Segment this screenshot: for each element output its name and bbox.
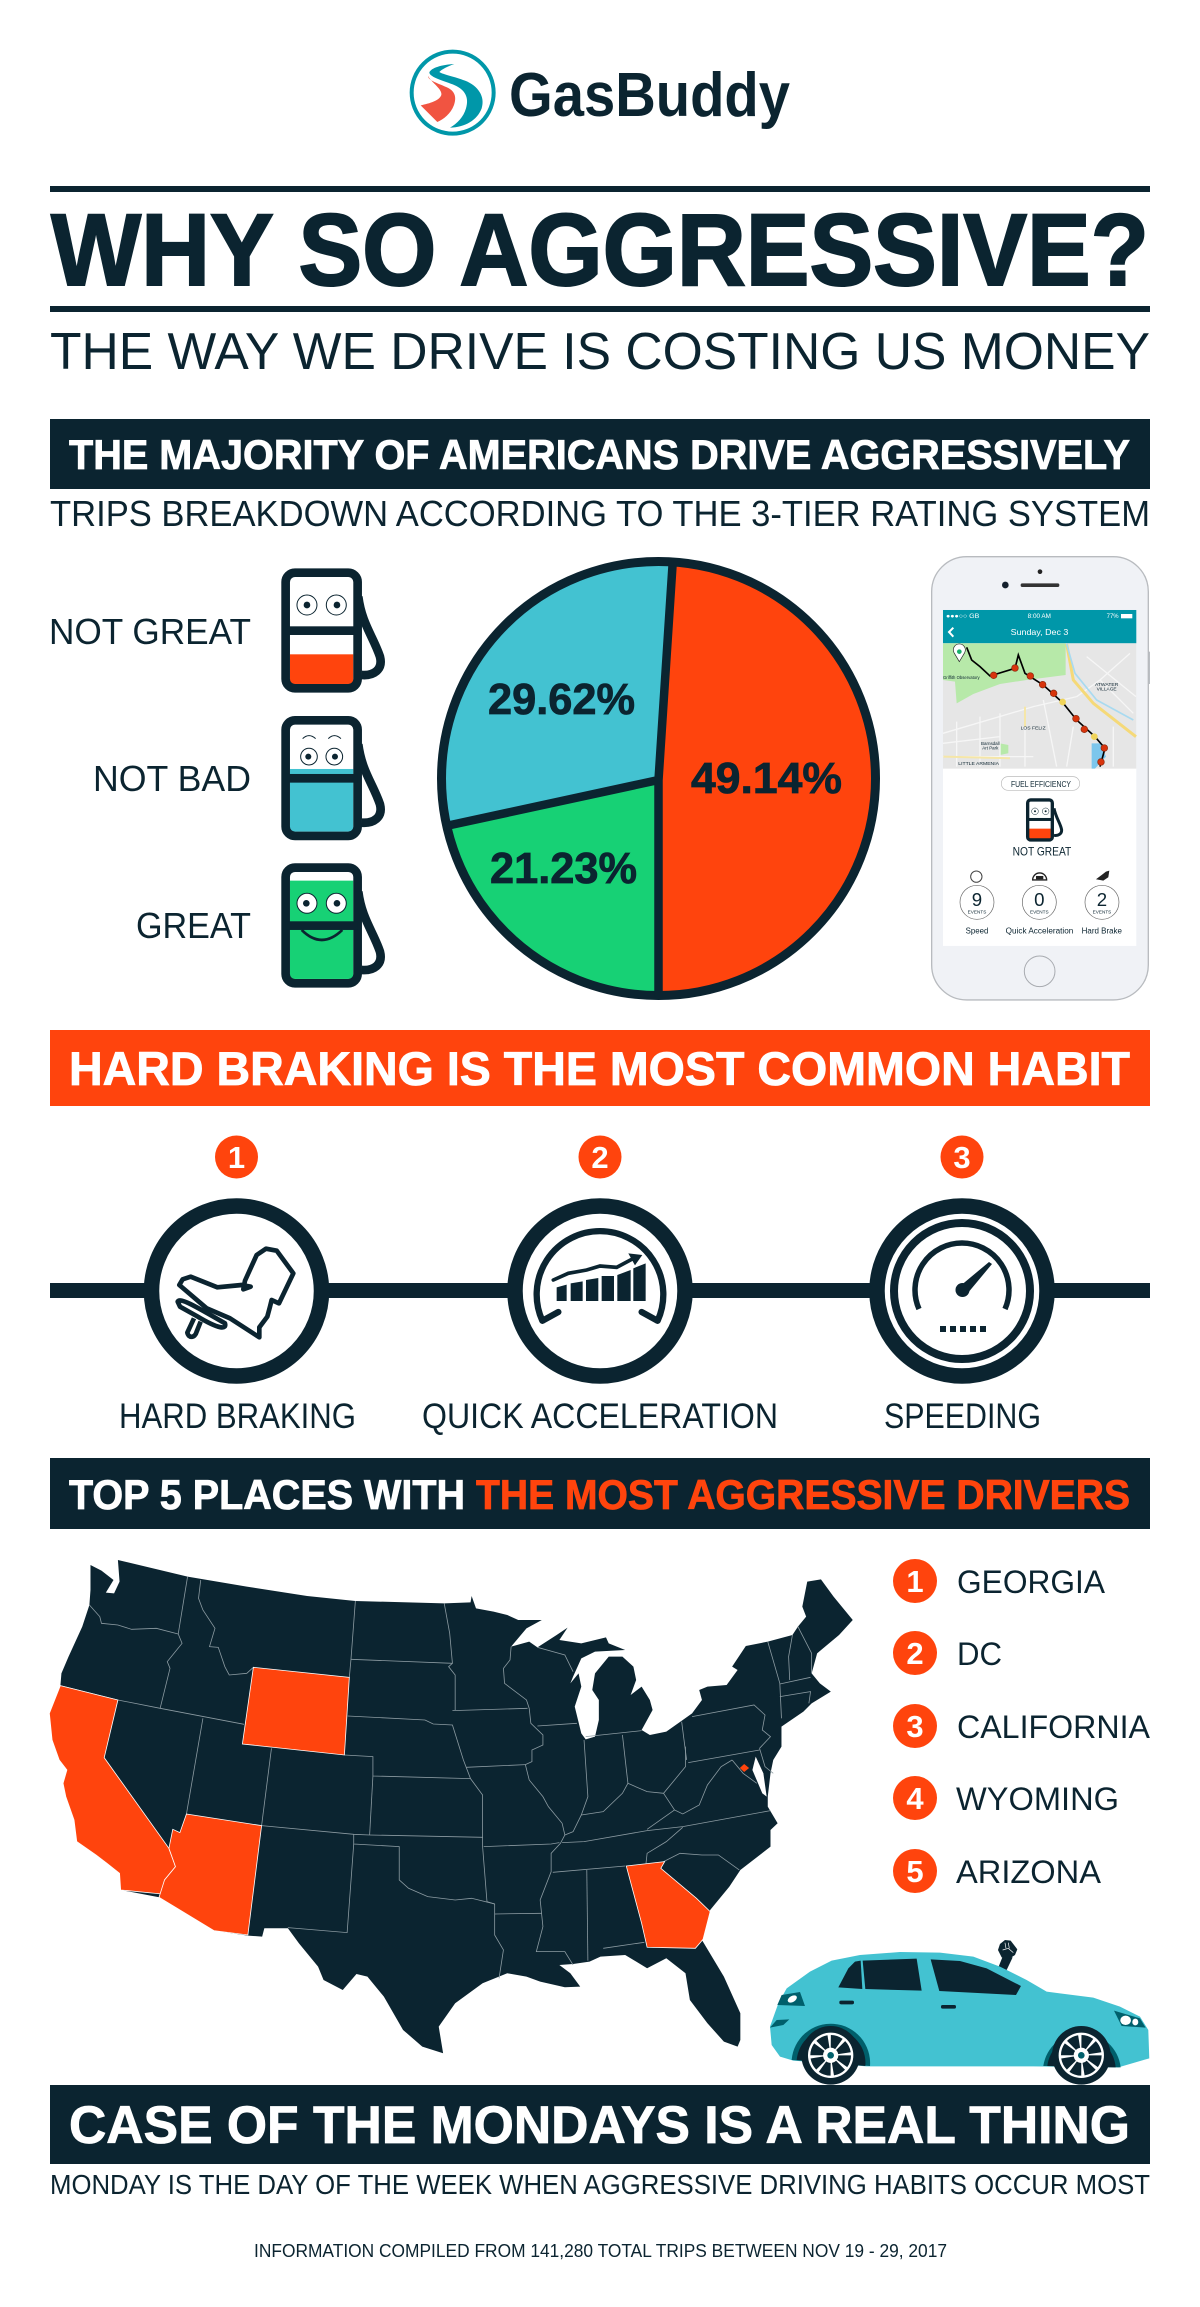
legend: great: GREAT bbox=[136, 905, 251, 946]
event counters bbox=[960, 871, 1123, 935]
banner: top 5 places: THE MOST AGGRESSIVE DRIVERS bbox=[476, 1471, 1130, 1518]
rank 2: DC: DC bbox=[957, 1636, 1002, 1672]
timeline line bbox=[50, 1283, 1150, 1298]
rank 1: Georgia: GEORGIA bbox=[957, 1564, 1106, 1600]
rank 5: Arizona bbox=[893, 1849, 1102, 1893]
fuel efficiency pill bbox=[1001, 777, 1080, 790]
icon: speedometer bbox=[894, 1223, 1030, 1359]
icon: road in circle bbox=[412, 52, 494, 134]
rank 4: Wyoming: WYOMING bbox=[956, 1781, 1119, 1817]
slice: great bbox=[447, 779, 658, 996]
habit 1: hard braking: HARD BRAKING bbox=[119, 1397, 356, 1436]
event counters: EVENTS bbox=[1093, 910, 1111, 915]
event counters: EVENTS bbox=[968, 910, 986, 915]
slice: not great bbox=[658, 562, 876, 996]
trip map: LITTLE ARMENIA bbox=[958, 761, 999, 766]
map: state borders bbox=[60, 1577, 812, 1978]
habit 2: quick acceleration bbox=[422, 1136, 778, 1436]
slice: not bad bbox=[441, 562, 673, 826]
rank 2: DC bbox=[893, 1631, 1002, 1675]
rank 1: Georgia bbox=[893, 1559, 1106, 1603]
legend: not great: NOT GREAT bbox=[49, 611, 251, 652]
rank 3: California bbox=[893, 1704, 1151, 1748]
rank 4: Wyoming: 4 bbox=[906, 1781, 924, 1816]
habit 1: hard braking bbox=[119, 1136, 356, 1436]
windows bbox=[838, 1959, 1021, 2009]
event counters: Speed bbox=[966, 926, 988, 935]
habit 3: speeding: SPEEDING bbox=[884, 1397, 1041, 1436]
text: trips breakdown: TRIPS BREAKDOWN ACCORDING TO THE 3-TIER RATING SYSTEM bbox=[50, 493, 1150, 534]
subtitle: THE WAY WE DRIVE IS COSTING US MONEY bbox=[50, 323, 1150, 381]
banner: hard braking bbox=[50, 1030, 1150, 1106]
trip map: LOS FELIZ bbox=[1021, 726, 1046, 731]
ranked list bbox=[893, 1559, 1151, 1893]
fist bbox=[998, 1940, 1017, 1970]
habit 3: speeding bbox=[877, 1136, 1047, 1436]
rear wheel bbox=[792, 2024, 870, 2085]
state: Georgia bbox=[626, 1862, 710, 1948]
app header: Sunday, Dec 3 bbox=[1011, 627, 1069, 637]
lights bbox=[770, 1992, 1146, 2028]
event counters: Hard Brake bbox=[1082, 926, 1123, 935]
state: California bbox=[49, 1686, 175, 1894]
mini gauge bbox=[1028, 800, 1062, 840]
value: 29.62%: 29.62% bbox=[488, 675, 635, 724]
rank 3: California: CALIFORNIA bbox=[957, 1709, 1151, 1745]
trip map: Art Park bbox=[982, 746, 999, 751]
app header bbox=[943, 610, 1136, 643]
icon: red gauge bbox=[286, 573, 381, 688]
icon: green gauge bbox=[286, 868, 381, 983]
banner: hard braking: HARD BRAKING IS THE MOST COMMON HABIT bbox=[69, 1042, 1130, 1095]
trip map: VILLAGE bbox=[1097, 687, 1117, 692]
trip map bbox=[943, 643, 1136, 769]
habit 2: quick acceleration: 2 bbox=[591, 1140, 609, 1175]
banner: top 5 places: TOP 5 PLACES WITH bbox=[69, 1471, 465, 1518]
state: DC bbox=[740, 1764, 749, 1772]
trip map: Griffith Observatory bbox=[943, 675, 980, 680]
event counters: EVENTS bbox=[1030, 910, 1049, 915]
logo: GasBuddy bbox=[412, 52, 790, 134]
banner: top 5 places bbox=[50, 1458, 1150, 1529]
banner: majority of Americans bbox=[50, 419, 1150, 489]
event counters: 2 bbox=[1097, 889, 1107, 910]
state: Wyoming bbox=[242, 1667, 349, 1755]
rank 5: Arizona: ARIZONA bbox=[956, 1854, 1102, 1890]
car body bbox=[770, 1952, 1149, 2067]
footnote: INFORMATION COMPILED FROM 141,280 TOTAL TRIPS BETWEEN NOV 19 - 29, 2017 bbox=[254, 2241, 947, 2261]
pie chart bbox=[441, 558, 876, 998]
habit 3: speeding: 3 bbox=[953, 1140, 971, 1175]
trip map: ATWATER bbox=[1095, 682, 1118, 687]
rule top bbox=[50, 186, 1150, 192]
habit 1: hard braking: 1 bbox=[228, 1140, 245, 1175]
banner: case of the Mondays: CASE OF THE MONDAYS IS A REAL THING bbox=[69, 2096, 1130, 2155]
rule bottom bbox=[50, 306, 1150, 312]
event counters: 0 bbox=[1034, 889, 1045, 910]
rank 3: California: 3 bbox=[906, 1709, 924, 1744]
banner: majority of Americans: THE MAJORITY OF AMERICANS DRIVE AGGRESSIVELY bbox=[69, 431, 1130, 478]
map: Chesapeake Bay bbox=[752, 1757, 767, 1797]
rank 1: Georgia: 1 bbox=[906, 1564, 924, 1599]
legend: not bad: NOT BAD bbox=[93, 758, 251, 799]
title: WHY SO AGGRESSIVE? bbox=[51, 193, 1149, 307]
app header: ●●●○○ GB bbox=[946, 613, 979, 620]
legend: not great bbox=[49, 573, 381, 688]
legend: great bbox=[136, 868, 381, 983]
icon: foot on brake bbox=[178, 1249, 293, 1337]
icon: car with fist bbox=[770, 1940, 1149, 2085]
value: 49.14%: 49.14% bbox=[691, 754, 842, 803]
event counters: 9 bbox=[972, 889, 982, 910]
rank 5: Arizona: 5 bbox=[906, 1854, 924, 1889]
trip map: Barnsdall bbox=[981, 741, 1000, 746]
rating text: NOT GREAT bbox=[1013, 845, 1072, 859]
habit 2: quick acceleration: QUICK ACCELERATION bbox=[422, 1397, 778, 1436]
event counters: Quick Acceleration bbox=[1006, 926, 1073, 935]
front wheel bbox=[1043, 2026, 1121, 2085]
phone mockup bbox=[932, 557, 1150, 1000]
fuel efficiency pill: FUEL EFFICIENCY bbox=[1011, 780, 1072, 789]
state: Arizona bbox=[159, 1814, 262, 1935]
value: 21.23%: 21.23% bbox=[490, 844, 637, 893]
rank 4: Wyoming bbox=[893, 1776, 1119, 1820]
rank 2: DC: 2 bbox=[906, 1636, 924, 1671]
legend: not bad bbox=[93, 720, 381, 836]
icon: blue gauge bbox=[286, 720, 381, 836]
app header: 8:00 AM bbox=[1028, 613, 1051, 620]
icon: acceleration dial bbox=[537, 1231, 663, 1321]
map: United States bbox=[49, 1560, 853, 2053]
map: country outline bbox=[49, 1560, 853, 2053]
app header: 77% bbox=[1107, 613, 1119, 620]
logo wordmark: GasBuddy bbox=[509, 61, 790, 130]
